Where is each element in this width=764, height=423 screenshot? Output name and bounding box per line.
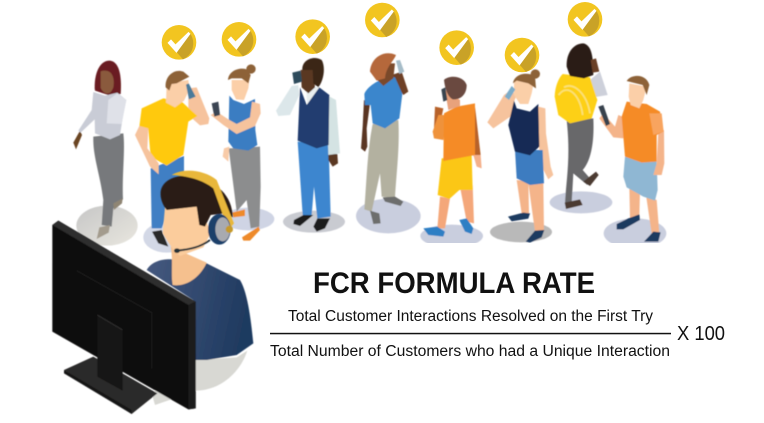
- agent desk surface: [152, 351, 247, 405]
- customer: man in yellow t-shirt on the phone: [135, 71, 209, 253]
- customer: woman with yellow backpack: [550, 43, 612, 213]
- computer monitor: [52, 221, 196, 414]
- check badges, left three: [162, 19, 330, 60]
- title: FCR FORMULA RATE: [313, 267, 595, 300]
- multiplier: X 100: [677, 323, 725, 345]
- customer: man in orange t-shirt with shorts: [598, 76, 666, 248]
- formula numerator: Total Customer Interactions Resolved on the First Try: [288, 308, 653, 325]
- customer: man in navy vest: [276, 58, 345, 233]
- fraction bar: [270, 333, 671, 334]
- customer: man in orange shirt and yellow shorts: [420, 77, 483, 247]
- customer: woman in navy tank top: [487, 69, 553, 243]
- agent at computer with headset: [52, 171, 253, 414]
- formula denominator: Total Number of Customers who had a Unique Interaction: [270, 343, 670, 360]
- agent headset: [172, 171, 234, 253]
- customer: woman in blue top with phone: [211, 64, 274, 241]
- agent head and neck: [161, 176, 233, 285]
- customer: woman in blue t-shirt: [356, 53, 421, 233]
- customer: woman in white shirt: [73, 61, 138, 246]
- group of customers, left half: [73, 58, 345, 253]
- agent torso: [147, 259, 253, 360]
- check badges, right four: [365, 2, 602, 72]
- group of customers, right half: [356, 43, 666, 248]
